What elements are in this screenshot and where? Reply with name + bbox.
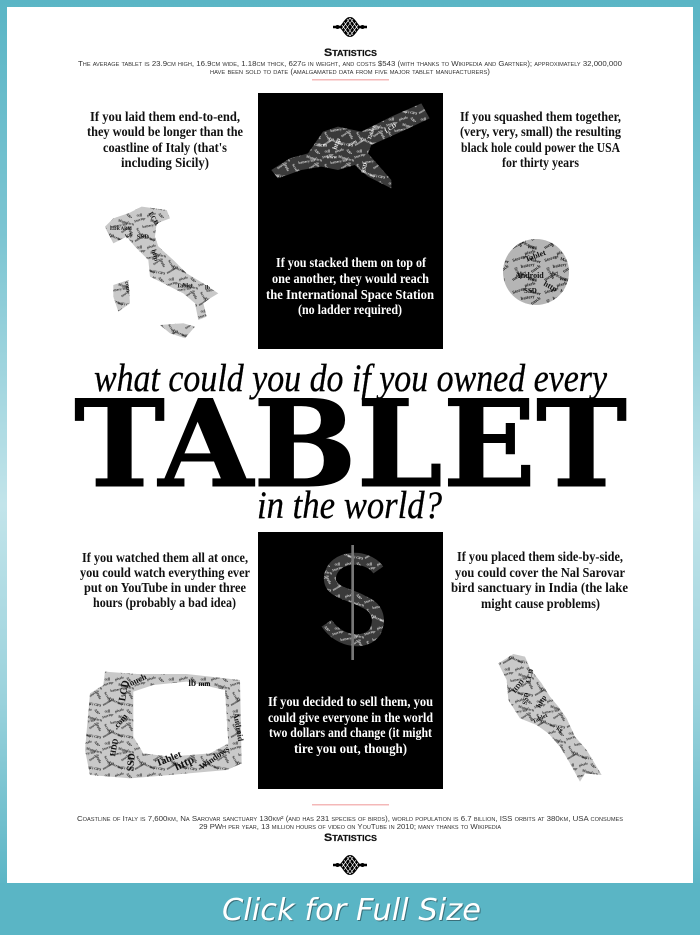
word cloud: tablet frame: .com [111, 711, 130, 731]
text: YouTube caption: hours (probably a bad idea) [93, 596, 236, 611]
text: YouTube caption: If you watched them all at once, [82, 551, 248, 566]
main word TABLET: TABLET [74, 374, 627, 515]
heading: top statistics: Statistics [324, 47, 378, 59]
word cloud: Italy: com [123, 281, 131, 292]
text: stacked caption: If you stacked them on top of [276, 256, 426, 271]
text: bird sanctuary caption [451, 550, 628, 612]
word cloud: tablet frame: lb [188, 679, 196, 689]
word cloud: tablet frame: HDD [108, 738, 120, 757]
text block: top statistics: The average tablet is 23.9cm high, 16.9cm wide, 1.18cm thick, 627g in weight, and costs $543 (with thanks to Wikipedia and Gartner); approximately 32,000,000 [78, 61, 622, 68]
word cloud: tablet frame: Windows [197, 743, 232, 772]
icon: bottom ornament [333, 855, 367, 875]
word cloud: India sanctuary shape: LCD [525, 668, 536, 684]
text block: bottom statistics [77, 816, 624, 831]
word cloud: tablet frame: http [173, 754, 196, 773]
text: black hole caption: for thirty years [502, 156, 579, 171]
text: black hole caption [460, 110, 621, 171]
icon: top ornament [333, 17, 367, 37]
text block: top statistics [78, 61, 622, 76]
heading: bottom statistics: Statistics [324, 832, 378, 844]
bottom banner: Click for Full Size [222, 893, 481, 928]
word cloud: black hole circle [503, 239, 569, 305]
text: bird sanctuary caption: might cause problems) [481, 597, 600, 612]
word cloud: Italy: lb [205, 285, 211, 291]
text: Italy caption: they would be longer than the [87, 125, 243, 140]
text block: bottom statistics: 29 PWh per year, 13 million hours of video on YouTube in 2010; many thanks to Wikipedia [199, 824, 502, 831]
text: black hole caption: If you squashed them together, [460, 110, 621, 125]
text: bird sanctuary caption: bird sanctuary in India (the lake [451, 581, 628, 596]
word cloud: tablet frame: touch [125, 671, 148, 689]
text: YouTube caption: you could watch everything ever [80, 566, 250, 581]
word cloud: black hole circle: Android [515, 271, 544, 280]
text: sell caption: tire you out, though) [294, 742, 407, 757]
word cloud: tablet frame: LCD [117, 679, 132, 702]
word cloud: rifle-shaped: Tablet [367, 125, 378, 141]
word cloud: India sanctuary shape: http [534, 694, 548, 709]
text: black hole caption: (very, very, small) the resulting [460, 125, 621, 140]
word cloud: tablet frame: SSD [125, 753, 138, 772]
text: bird sanctuary caption: If you placed them side-by-side, [457, 550, 623, 565]
panel: top black column [258, 93, 443, 349]
word cloud: India sanctuary shape [498, 654, 602, 782]
word cloud: tablet frame [85, 671, 245, 778]
word cloud: rifle-shaped: #cm [318, 144, 328, 149]
text block: top statistics: have been sold to date (amalgamated data from five major tablet manufacturers) [210, 69, 490, 76]
word cloud: rifle-shaped: .com [347, 139, 359, 148]
word cloud: black hole circle: SSD [524, 287, 537, 295]
word cloud: India sanctuary shape: Tablet [532, 713, 549, 725]
text: sell caption [268, 695, 433, 757]
word cloud: tablet frame: mm [198, 679, 211, 688]
text: sell caption: If you decided to sell them, you [268, 695, 433, 710]
word cloud: rifle-shaped: SSD [361, 162, 369, 174]
word cloud: rifle-shaped [271, 103, 430, 188]
text: stacked caption: the International Space Station [266, 288, 434, 303]
text: stacked caption: (no ladder required) [298, 303, 402, 318]
bottom banner: Click for Full Size [223, 894, 482, 929]
text: Italy caption [87, 110, 243, 171]
text: bird sanctuary caption: you could cover the Nal Sarovar [455, 566, 625, 581]
text: Italy caption: coastline of Italy (that's [103, 141, 227, 156]
word cloud: Italy: EDR ARM [110, 227, 132, 232]
text: sell caption: two dollars and change (it might [269, 726, 432, 741]
text: sell caption: could give everyone in the world [268, 711, 433, 726]
subtitle line 2: in the world? [257, 484, 442, 527]
word cloud: Italy: SSD [137, 233, 149, 240]
text: YouTube caption [80, 551, 250, 611]
title [74, 357, 627, 527]
word cloud: tablet frame: Tablet [154, 749, 184, 769]
panel: bottom black column [258, 532, 443, 789]
word cloud: Italy: http [150, 249, 160, 262]
text block: bottom statistics: Coastline of Italy is 7,600km, Na Sarovar sanctuary 130km² (and has 231 species of birds), world population is 6.7 billion, ISS orbits at 380km, USA consumes [77, 816, 624, 823]
word cloud: rifle-shaped: www [326, 155, 338, 160]
text: YouTube caption: put on YouTube in under three [84, 581, 246, 596]
word cloud: India sanctuary shape: HDD [511, 679, 526, 695]
word cloud: black hole circle: Tablet [524, 248, 547, 264]
word cloud: Italy [105, 207, 218, 338]
text: black hole caption: black hole could power the USA [461, 141, 621, 156]
word cloud: dollar sign [327, 545, 378, 660]
subtitle line 1: what could you do if you owned every [94, 357, 608, 400]
word cloud: tablet frame: Android [231, 712, 245, 742]
word cloud: Italy: Tablet [177, 284, 193, 290]
word cloud: black hole circle: http [542, 279, 559, 294]
word cloud: rifle-shaped: LCD [384, 122, 398, 135]
text: Italy caption: If you laid them end-to-end, [90, 110, 240, 125]
text: stacked caption [266, 256, 434, 318]
word cloud: Italy: kg [125, 232, 133, 240]
word cloud: India sanctuary shape: kg [555, 726, 563, 734]
text: Italy caption: including Sicily) [121, 156, 209, 171]
text: stacked caption: one another, they would reach [272, 272, 429, 287]
bottom banner [0, 883, 700, 935]
word cloud: Italy: LCD [147, 211, 160, 227]
word cloud: India sanctuary shape: SSD [522, 692, 531, 705]
word cloud: rifle-shaped: http [332, 137, 342, 151]
